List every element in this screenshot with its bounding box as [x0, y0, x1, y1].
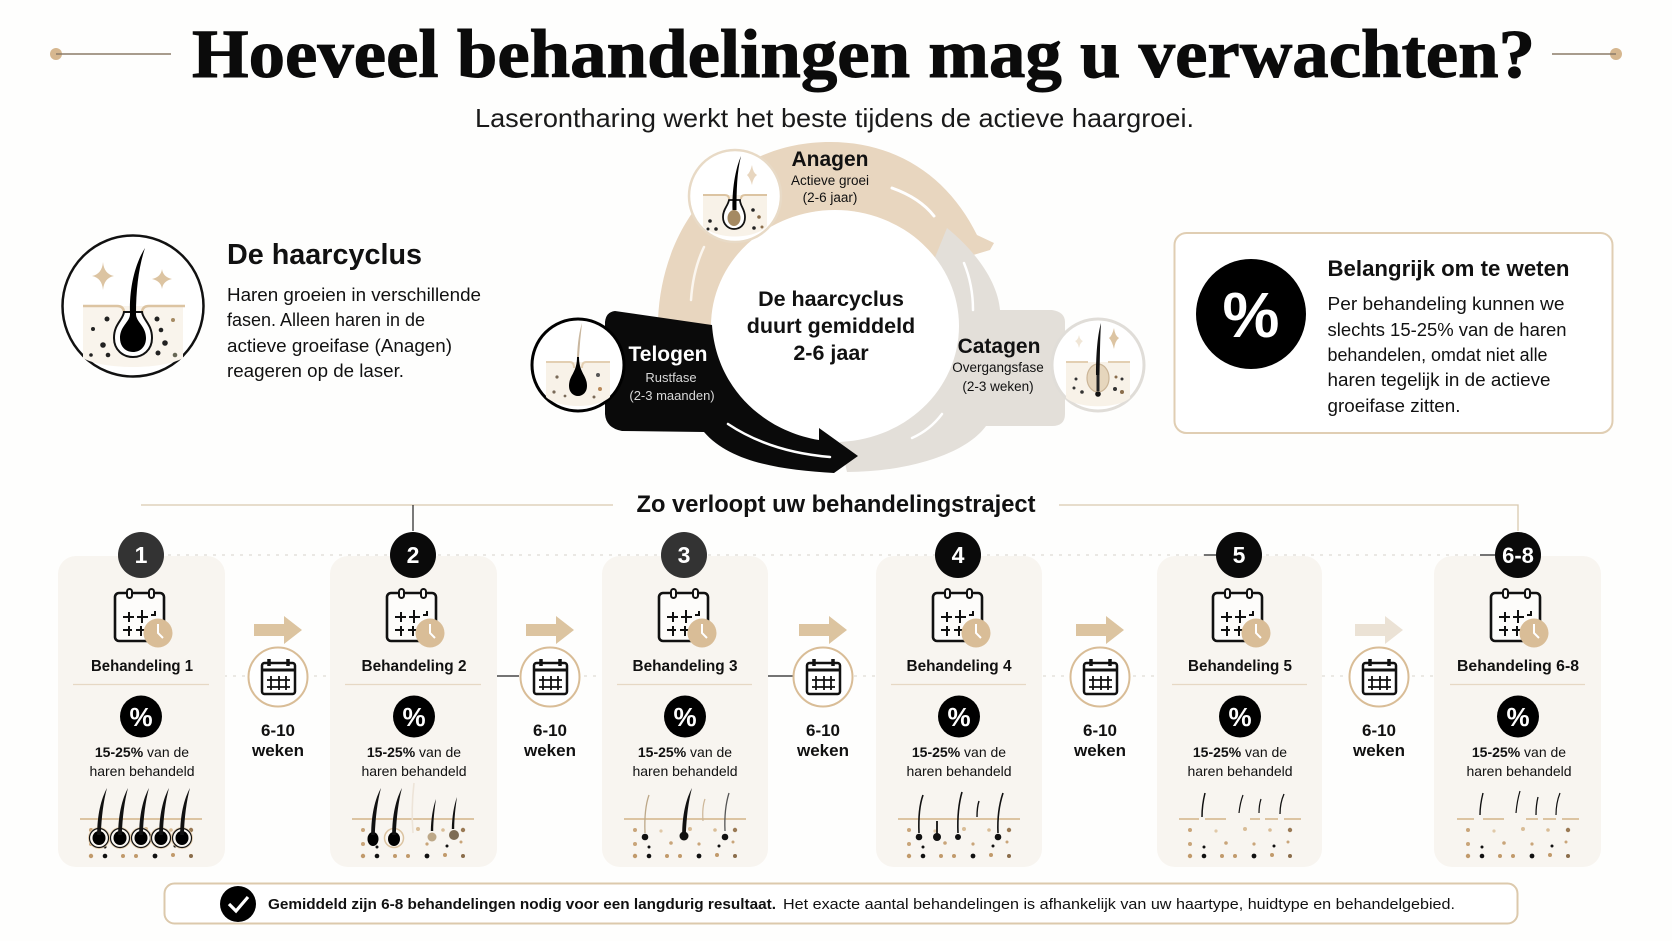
- icon: calendar: [1491, 589, 1548, 648]
- interval 1: [248, 616, 308, 760]
- label: Behandeling 3: [632, 658, 738, 675]
- icon: calendar: [933, 589, 990, 648]
- label: anagen: Anagen: [791, 148, 869, 171]
- icon: percent: [120, 696, 162, 738]
- interval 4: [1070, 616, 1130, 760]
- arrow: [1076, 616, 1124, 644]
- body text: actieve groeifase (Anagen): [227, 335, 452, 356]
- inner circle: [711, 210, 959, 442]
- icon: catagen follicle: [1052, 319, 1144, 411]
- footer callout: [164, 884, 1518, 924]
- body text: Haren groeien in verschillende: [227, 284, 481, 305]
- icon: check: [220, 886, 256, 922]
- subtitle: Laserontharing werkt het beste tijdens de actieve haargroei.: [475, 103, 1194, 133]
- label: telogen: Telogen: [629, 343, 707, 366]
- duration: weken: [1073, 741, 1126, 760]
- duration: 6-10: [806, 721, 840, 740]
- duration: 6-10: [533, 721, 567, 740]
- step number: 1: [135, 542, 148, 568]
- percent text: 15-25% van de: [367, 744, 461, 760]
- percent text: [1466, 744, 1572, 779]
- step number: 6-8: [1502, 543, 1534, 568]
- label: Behandeling 6-8: [1457, 658, 1579, 675]
- illustration: hair density: [1457, 791, 1579, 858]
- center label: De haarcyclus: [758, 287, 904, 311]
- label: catagen: (2-3 weken): [962, 379, 1034, 394]
- duration: [796, 721, 849, 760]
- step number: [390, 532, 436, 578]
- percent text: haren behandeld: [1187, 763, 1293, 779]
- percent text: haren behandeld: [632, 763, 738, 779]
- label: Behandeling 1: [91, 658, 193, 675]
- title ornament right: [1552, 48, 1622, 60]
- note text: Per behandeling kunnen we: [1328, 293, 1564, 314]
- center label: 2-6 jaar: [793, 341, 869, 365]
- connector lines: [141, 505, 1518, 676]
- icon: calendar circle: [248, 648, 308, 706]
- icon: percent: [664, 696, 706, 738]
- step number: 5: [1233, 542, 1246, 568]
- step number: [1495, 532, 1541, 578]
- icon: calendar: [659, 589, 716, 648]
- percent text: haren behandeld: [1466, 763, 1572, 779]
- center label: duurt gemiddeld: [747, 314, 915, 338]
- label: catagen: Catagen: [958, 335, 1040, 358]
- section heading: Zo verloopt uw behandelingstraject: [636, 491, 1036, 518]
- icon: percent badge: %: [1223, 279, 1279, 351]
- percent text: [1187, 744, 1293, 779]
- percent text: [89, 744, 195, 779]
- body text: reageren op de laser.: [227, 360, 404, 381]
- duration: weken: [523, 741, 576, 760]
- percent text: 15-25% van de: [1193, 744, 1287, 760]
- label: telogen: Rustfase: [645, 370, 697, 385]
- icon: percent: [1219, 696, 1261, 738]
- icon: calendar: [387, 589, 444, 648]
- icon: calendar circle: [794, 648, 852, 706]
- note heading: Belangrijk om te weten: [1328, 256, 1570, 281]
- label: catagen: Overgangsfase: [952, 360, 1044, 375]
- chart: hair cycle: [532, 142, 1144, 473]
- duration: 6-10: [261, 721, 295, 740]
- percent text: 15-25% van de: [638, 744, 732, 760]
- step number: [1216, 532, 1262, 578]
- title: Hoeveel behandelingen mag u verwachten?: [192, 16, 1535, 92]
- icon: telogen follicle: [532, 319, 624, 411]
- icon: percent: [938, 696, 980, 738]
- illustration: hair density: [1179, 793, 1301, 858]
- icon: calendar circle: [520, 648, 580, 706]
- percent text: [906, 744, 1012, 779]
- icon: calendar: [115, 589, 172, 648]
- step number: 4: [952, 542, 965, 568]
- card: behandeling 6-8: [1434, 532, 1601, 867]
- illustration: hair density: [352, 783, 474, 858]
- note text: [1328, 293, 1566, 416]
- duration: [523, 721, 576, 760]
- percent text: haren behandeld: [906, 763, 1012, 779]
- percent text: haren behandeld: [361, 763, 467, 779]
- percent text: [361, 744, 467, 779]
- arrow: telogen: [605, 311, 858, 473]
- icon: percent: [1497, 696, 1539, 738]
- percent text: haren behandeld: [89, 763, 195, 779]
- card: behandeling 2: [330, 532, 497, 867]
- duration: [1073, 721, 1126, 760]
- step number: 2: [407, 542, 419, 568]
- heading: De haarcyclus: [227, 239, 422, 271]
- step number: [661, 532, 707, 578]
- highlight strokes: [691, 188, 973, 457]
- duration: weken: [1352, 741, 1405, 760]
- label: anagen: Actieve groei: [791, 173, 869, 188]
- label: anagen: (2-6 jaar): [803, 190, 857, 205]
- note text: behandelen, omdat niet alle: [1328, 344, 1548, 365]
- icon: calendar: [1213, 589, 1270, 648]
- label: Behandeling 4: [906, 658, 1012, 675]
- arrow: [799, 616, 847, 644]
- icon: anagen follicle: [689, 150, 781, 242]
- duration: weken: [796, 741, 849, 760]
- label: telogen: [629, 343, 715, 403]
- label: catagen: [952, 335, 1044, 394]
- icon: calendar circle: [1070, 648, 1130, 706]
- duration: 6-10: [1362, 721, 1396, 740]
- arrow: [526, 616, 574, 644]
- card: behandeling 5: [1157, 532, 1322, 867]
- interval 5: [1350, 616, 1408, 760]
- note text: haren tegelijk in de actieve: [1328, 369, 1550, 390]
- duration: [1352, 721, 1405, 760]
- percent text: 15-25% van de: [912, 744, 1006, 760]
- footer text: Het exacte aantal behandelingen is afhankelijk van uw haartype, huidtype en behandelgebied.: [783, 897, 1455, 913]
- illustration: hair density: [80, 788, 202, 858]
- duration: [251, 721, 304, 760]
- percent text: 15-25% van de: [1472, 744, 1566, 760]
- card: behandeling 4: [876, 532, 1042, 867]
- panel: important note: [1174, 233, 1612, 433]
- panel: haarcyclus intro: [62, 236, 481, 381]
- body text: [227, 284, 481, 381]
- arc: anagen: [658, 142, 994, 340]
- note text: slechts 15-25% van de haren: [1328, 319, 1566, 340]
- illustration: hair density: [898, 792, 1020, 858]
- icon: calendar circle: [1350, 648, 1408, 706]
- label: Behandeling 5: [1188, 658, 1292, 675]
- title ornament left: [50, 48, 171, 60]
- step number: [935, 532, 981, 578]
- arrow: [254, 616, 302, 644]
- icon: percent: [393, 696, 435, 738]
- duration: 6-10: [1083, 721, 1117, 740]
- icon: percent badge: [1196, 259, 1306, 369]
- percent text: [632, 744, 738, 779]
- footer bold text: Gemiddeld zijn 6-8 behandelingen nodig voor een langdurig resultaat.: [268, 897, 776, 913]
- note text: groeifase zitten.: [1328, 395, 1460, 416]
- percent text: 15-25% van de: [95, 744, 189, 760]
- arc: catagen: [830, 228, 1065, 472]
- icon: hair follicle: [62, 236, 204, 376]
- duration: weken: [251, 741, 304, 760]
- interval 2: [520, 616, 580, 760]
- label: telogen: (2-3 maanden): [629, 388, 715, 403]
- card: behandeling 3: [602, 532, 768, 867]
- interval 3: [794, 616, 852, 760]
- body text: fasen. Alleen haren in de: [227, 309, 425, 330]
- step number: [118, 532, 164, 578]
- center label: [747, 287, 915, 365]
- card: behandeling 1: [58, 532, 225, 867]
- arrow: [1355, 616, 1403, 644]
- step number: 3: [678, 542, 690, 568]
- label: Behandeling 2: [362, 658, 466, 675]
- label: anagen: [791, 148, 869, 205]
- illustration: hair density: [624, 788, 746, 858]
